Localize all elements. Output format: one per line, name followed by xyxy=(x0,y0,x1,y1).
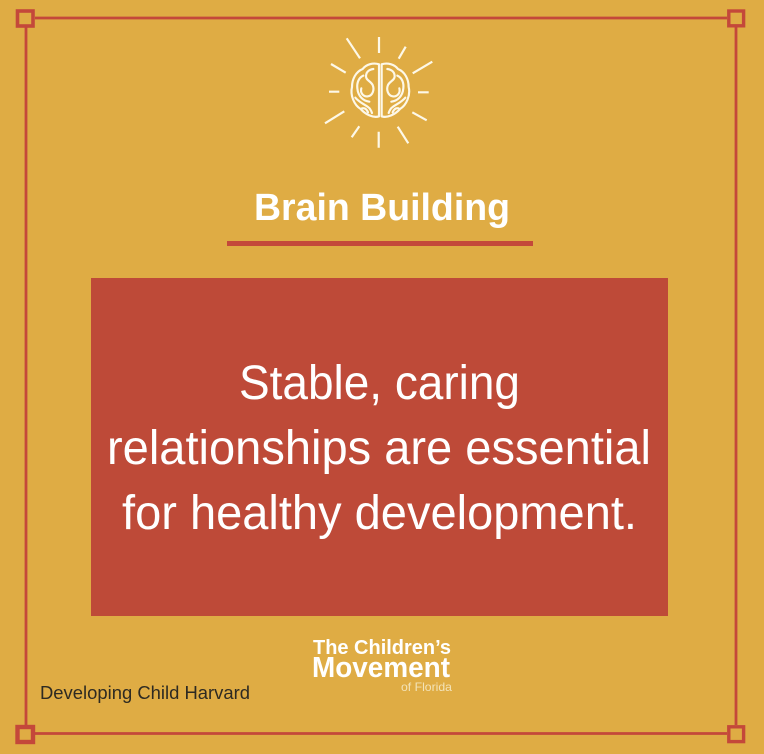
logo: The Children's Movement of Florida xyxy=(312,637,452,694)
message text: Stable, caring xyxy=(239,357,520,410)
message text xyxy=(107,357,651,540)
source credit: Developing Child Harvard xyxy=(40,682,250,703)
icon: brain with rays xyxy=(325,37,432,148)
panel: main message xyxy=(91,278,668,616)
message text: for healthy development. xyxy=(122,487,637,540)
title: Brain Building xyxy=(254,187,510,229)
message text: relationships are essential xyxy=(107,422,651,475)
title underline xyxy=(227,241,533,246)
logo: The Children's Movement of Florida: Movement xyxy=(312,652,450,684)
logo: The Children's Movement of Florida: The Children’s xyxy=(313,637,451,659)
logo: The Children's Movement of Florida: of Florida xyxy=(401,680,452,694)
